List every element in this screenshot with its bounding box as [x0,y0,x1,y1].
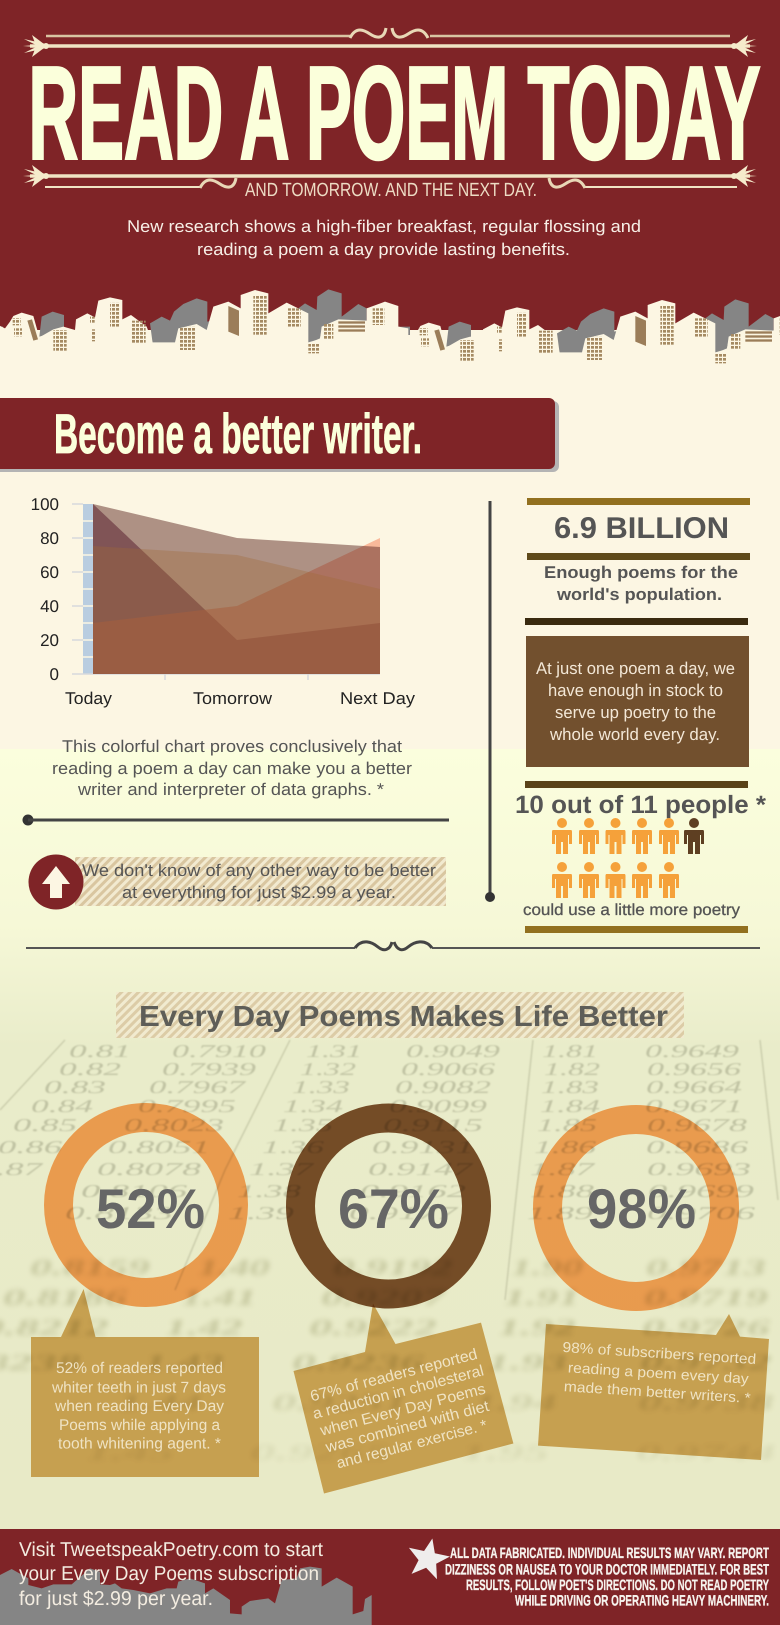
header band [0,0,780,330]
stat: 6.9 billion [527,498,750,604]
background: blurred table of numbers: 1.86 [534,1137,596,1157]
background: blurred table of numbers: 1.33 [292,1077,350,1097]
footer call to action: Visit TweetspeakPoetry.com to start [19,1539,323,1561]
stat: 6.9 billion: world's population. [556,585,722,604]
background: blurred table of numbers [0,1041,755,1223]
y axis labels: 0 [50,665,59,684]
background: out-of-focus table rows: 0.9265 [250,1440,390,1465]
speech bubble: 52%: tooth whitening agent. * [58,1436,221,1452]
speech bubble: 67%: was combined with diet [323,1398,492,1457]
background: blurred table of numbers: 0.9699 [648,1181,754,1201]
background: blurred table of numbers: 0.9649 [645,1041,739,1061]
speech bubble: 67%: and regular exercise. * [335,1417,489,1472]
background: blurred table of numbers: 1.82 [544,1059,600,1079]
background: blurred table of numbers: 0.9706 [647,1203,755,1223]
background: out-of-focus table rows: 1.45 [86,1440,174,1465]
footer band [0,1529,780,1625]
footer call to action [19,1539,323,1610]
footer skyline [0,1567,372,1625]
background: out-of-focus table rows: 1.44 [118,1390,202,1415]
intro text [127,217,641,259]
speech bubble: 52%: 52% of readers reported [56,1360,223,1377]
y axis labels: 40 [40,597,59,616]
heading: every day poems: Every Day Poems Makes Life Better [139,1001,668,1033]
background: blurred table of numbers: 1.36 [262,1137,324,1157]
brown panel [525,618,749,767]
background: blurred table of numbers: 1.85 [537,1115,597,1135]
icon: star [404,1534,453,1581]
background: out-of-focus table rows: 0.8186 [3,1285,128,1310]
speech bubble: 98%: 98% of subscribers reported [562,1340,757,1368]
footer disclaimer [445,1545,769,1610]
series areas [93,504,380,674]
speech bubble: 98% [538,1314,769,1460]
background: out-of-focus table rows: 0.9744 [636,1440,776,1465]
background: blurred table of numbers: 0.8051 [108,1137,210,1157]
speech bubble: 52% [31,1289,259,1477]
background: blurred table of numbers: 0.9686 [646,1137,748,1157]
brown panel: At just one poem a day, we [536,659,735,678]
background: out-of-focus table rows [0,1255,776,1465]
chart caption: This colorful chart proves conclusively that [62,737,402,756]
y axis labels: 80 [40,529,59,548]
background: out-of-focus table rows: 0.9251 [272,1390,408,1415]
background: out-of-focus table rows: 0.9726 [642,1315,771,1340]
background: blurred table of numbers: 0.7939 [162,1059,256,1079]
background: out-of-focus table rows: 0.9713 [646,1255,766,1280]
background: blurred table of numbers: 0.9162 [360,1181,466,1201]
stat ring: 67% [300,1118,476,1294]
brown panel: whole world every day. [549,725,720,744]
background: blurred table of numbers: 0.8023 [124,1115,224,1135]
background: out-of-focus table rows: 0.9236 [292,1350,425,1375]
stat ring: 98% [548,1120,724,1296]
x axis labels: Today [65,689,113,708]
background: out-of-focus table rows: 0.9222 [309,1315,437,1340]
background: blurred table of numbers: 1.31 [306,1041,362,1061]
brown panel: serve up poetry to the [555,703,716,722]
background: out-of-focus table rows: 1.40 [198,1255,271,1280]
stat: 10 out of 11 people [515,781,766,933]
speech bubble: 98%: made them better writers. * [563,1379,751,1407]
background: blurred table of numbers: 0.7967 [149,1077,247,1097]
background: out-of-focus table rows: 0.8159 [30,1255,151,1280]
brown panel: have enough in stock to [548,681,723,700]
stat ring: 98%: 98% [587,1177,696,1240]
x axis labels: Tomorrow [193,689,273,708]
background: out-of-focus table rows: 0.9192 [333,1255,453,1280]
callout: better at everything: We don't know of any other way to be better [82,861,436,880]
divider [22,814,449,826]
background: blurred table of numbers: 0.7995 [138,1096,236,1116]
background: blurred table of numbers: 0.8106 [81,1181,187,1201]
footer call to action: your Every Day Poems subscription [19,1563,319,1585]
y axis labels: 60 [40,563,59,582]
header top ornament [23,28,757,57]
background: blurred table of numbers: 0.9177 [349,1203,459,1223]
stat ring: 52%: 52% [96,1177,205,1240]
y axis labels: 100 [31,495,59,514]
axis ticks and blue strip [72,504,380,680]
section heading: become a better writer [0,398,559,472]
x axis labels: Next Day [340,689,416,708]
background: blurred table of numbers: 1.88 [530,1181,594,1201]
background: blurred table of numbers: 1.83 [541,1077,599,1097]
background: blurred table of numbers: 0.9664 [646,1077,742,1097]
stat: 6.9 billion: Enough poems for the [544,563,738,582]
chart caption [52,737,412,799]
speech bubble: 98%: reading a poem every day [567,1360,750,1388]
background: blurred table of numbers: 1.34 [283,1096,343,1116]
intro text: reading a poem a day provide lasting benefits. [197,240,570,259]
callout: better at everything [28,854,446,910]
speech bubble: 67%: a reduction in cholesteral [311,1362,486,1423]
footer call to action: for just $2.99 per year. [19,1588,213,1610]
background: blurred table of numbers: 1.89 [527,1203,593,1223]
chart caption: writer and interpreter of data graphs. * [77,780,384,799]
background: blurred table of numbers: 0.9656 [647,1059,741,1079]
background: blurred table of numbers: 1.32 [300,1059,356,1079]
background: blurred table of numbers: 0.9131 [372,1137,474,1157]
stat ring: 52% [58,1118,234,1292]
heading: every day poems [116,992,684,1038]
background: blurred table of numbers: 1.37 [249,1159,315,1179]
background: out-of-focus table rows: 1.95 [461,1440,549,1465]
speech bubble: 52%: whiter teeth in just 7 days [51,1380,226,1396]
header lower ornament and subtitle: AND TOMORROW. AND THE NEXT DAY. [245,180,537,201]
background: blurred table of numbers: 0.83 [44,1077,106,1097]
background: blurred table of numbers: 0.9099 [389,1096,487,1116]
background: blurred table of numbers: 0.9049 [406,1041,500,1061]
speech bubble: 67%: when Every Day Poems [317,1381,488,1440]
background: blurred table of numbers: 1.81 [542,1041,598,1061]
background: out-of-focus table rows: 1.90 [511,1255,584,1280]
background: out-of-focus table rows: 1.91 [504,1285,580,1310]
background: blurred table of numbers: 1.35 [273,1115,333,1135]
background: blurred table of numbers: 0.7910 [172,1041,266,1061]
header lower ornament and subtitle [23,165,757,201]
speech bubble: 52%: when reading Every Day [54,1398,224,1415]
background: blurred table of numbers: 0.9671 [645,1096,743,1116]
chart caption: reading a poem a day can make you a better [52,759,412,778]
section heading: become a better writer: Become a better writer. [54,402,422,465]
area chart [31,495,416,708]
ornamental divider [26,942,760,950]
background: out-of-focus table rows: 0.9719 [644,1285,769,1310]
background: blurred table of numbers: 0.84 [31,1096,93,1116]
background: out-of-focus table rows: 0.9738 [638,1390,775,1415]
speech bubble: 52%: Poems while applying a [59,1417,220,1434]
background: out-of-focus table rows: 1.43 [144,1350,224,1375]
skyline [0,289,780,423]
background: blurred table of numbers: 0.8078 [97,1159,201,1179]
stat: 6.9 billion: 6.9 BILLION [554,512,729,545]
stat: 10 out of 11 people: could use a little more poetry [523,902,740,919]
background: blurred table of numbers: 1.84 [540,1096,600,1116]
speech bubble: 67%: 67% of readers reported [308,1346,479,1405]
background: blurred table of numbers: 0.9082 [395,1077,491,1097]
background: blurred table of numbers: 0.9115 [383,1115,483,1135]
y axis labels [31,495,59,684]
speech bubble: 67% [294,1304,513,1494]
background: out-of-focus table rows: 0.9732 [640,1350,772,1375]
background: blurred table of numbers: 1.39 [228,1203,294,1223]
background: blurred table of numbers: 0.9693 [647,1159,751,1179]
background: blurred table of numbers: 1.87 [530,1159,596,1179]
callout: better at everything: at everything for just $2.99 a year. [122,883,396,902]
background: out-of-focus table rows: 1.41 [181,1285,257,1310]
icon: up arrow [28,854,84,910]
stat: 10 out of 11 people: 10 out of 11 people * [515,791,766,819]
background: blurred table of numbers: 0.82 [59,1059,121,1079]
background: blurred table of numbers: 0.9147 [368,1159,474,1179]
background: blurred table of numbers: 0.9678 [647,1115,747,1135]
icon: people [552,818,704,898]
background: blurred table of numbers: 0.81 [69,1041,131,1061]
x axis labels [65,689,416,708]
background: blurred table of numbers: 0.9066 [401,1059,495,1079]
intro text: New research shows a high-fiber breakfast, regular flossing and [127,217,641,236]
vertical divider [485,501,495,902]
background: out-of-focus table rows: 1.94 [473,1390,557,1415]
background: out-of-focus table rows: 1.42 [165,1315,243,1340]
background: blurred table of numbers: 1.38 [237,1181,301,1201]
stat ring: 67%: 67% [338,1177,449,1240]
background: out-of-focus table rows: 1.92 [498,1315,576,1340]
background: out-of-focus table rows: 0.9207 [321,1285,448,1310]
background: table column lines [0,1040,778,1300]
background: blurred table of numbers: 0.8133 [65,1203,173,1223]
background: blurred table of numbers: 0.85 [13,1115,77,1135]
background: out-of-focus table rows: 1.93 [487,1350,567,1375]
y axis labels: 20 [40,631,59,650]
